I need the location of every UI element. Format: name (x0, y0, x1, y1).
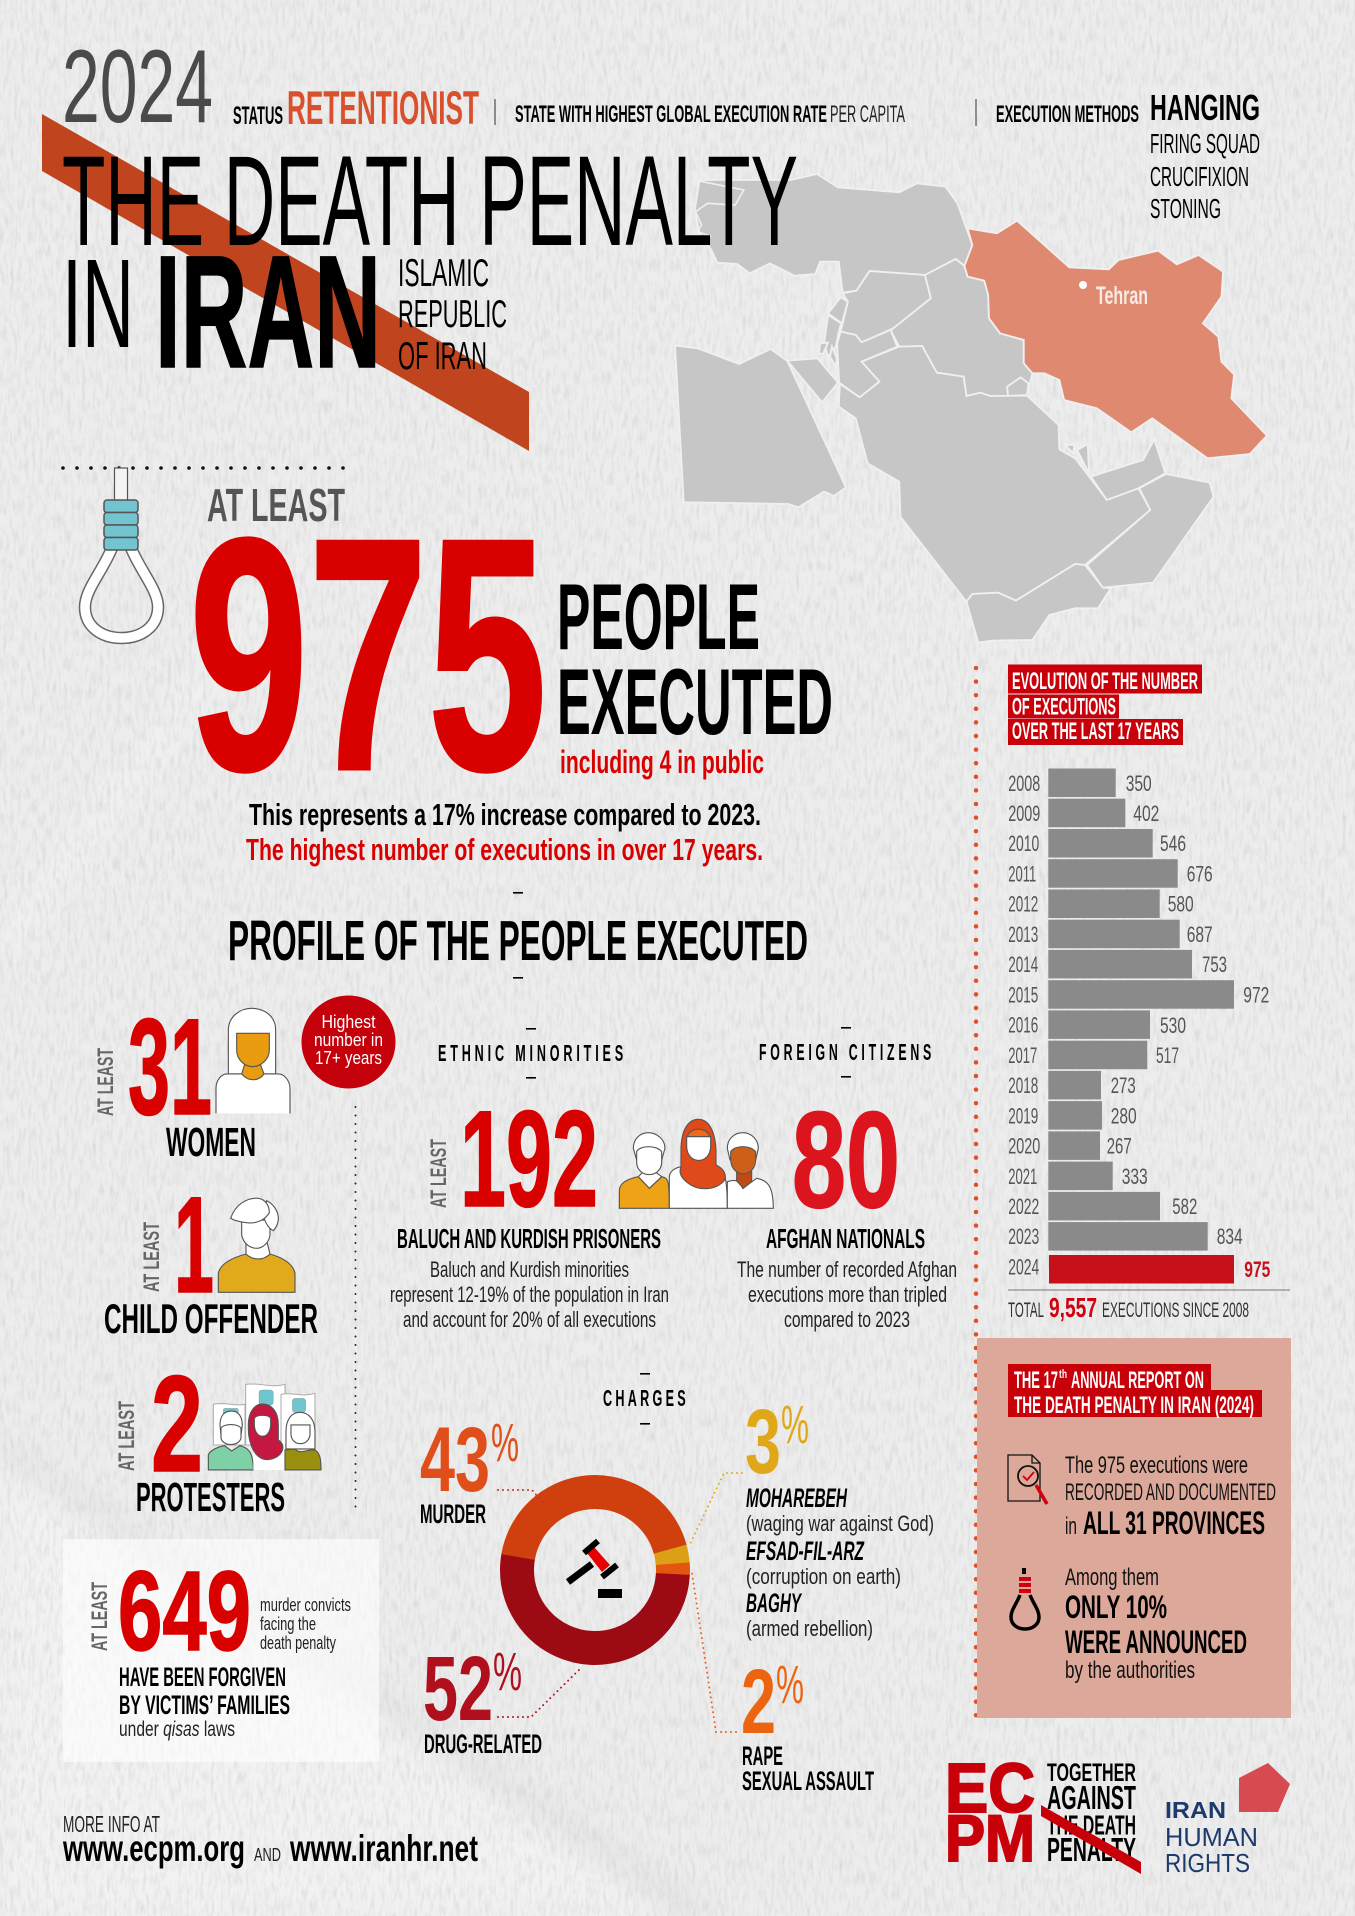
heading: profile: PROFILE OF THE PEOPLE EXECUTED (228, 909, 808, 973)
label: murder: 43 (420, 1409, 490, 1511)
bar chart heading: OVER THE LAST 17 YEARS (1012, 718, 1179, 745)
panel: forgiven: murder convicts (260, 1595, 351, 1615)
execution methods (996, 87, 1260, 224)
title: THE DEATH PENALTY (62, 130, 798, 273)
map of the Middle East (675, 174, 1267, 643)
icon: child (218, 1198, 295, 1292)
bar chart: executions per year: 267 (1107, 1134, 1132, 1158)
bar chart: executions per year: 2018 (1008, 1073, 1038, 1098)
women (93, 991, 290, 1165)
text: Baluch and Kurdish (390, 1223, 669, 1332)
women: AT LEAST (93, 1048, 118, 1116)
status: STATUS (233, 102, 283, 130)
protesters (114, 1348, 321, 1520)
label: moharebeh: % (781, 1395, 809, 1455)
label: drug-related: % (493, 1642, 522, 1702)
bar chart: executions per year: 402 (1133, 801, 1159, 826)
bar chart: executions per year: 2017 (1008, 1043, 1037, 1068)
bar chart heading: EVOLUTION OF THE NUMBER (1012, 668, 1198, 695)
bar chart: executions per year: 2013 (1008, 922, 1038, 947)
text: Afghan nationals: compared to 2023 (784, 1307, 910, 1332)
ethnic minorities number (426, 1083, 598, 1236)
label: rape: % (776, 1655, 804, 1715)
headline number: PEOPLE (557, 564, 760, 669)
execution methods: CRUCIFIXION (1150, 161, 1249, 192)
callout: highest number: Highest (322, 1012, 376, 1032)
icon: group of people (619, 1119, 773, 1208)
text: Afghan nationals (737, 1223, 957, 1332)
bar chart: executions per year: 2016 (1008, 1012, 1038, 1038)
title: OF IRAN (398, 335, 487, 378)
logo: Iran Human Rights: IRAN (1165, 1797, 1226, 1823)
text: Baluch and Kurdish: represent 12-19% of the population in Iran (390, 1282, 669, 1307)
bar chart: executions per year: 676 (1187, 862, 1213, 886)
more info: AND (254, 1845, 281, 1865)
bar chart heading: OF EXECUTIONS (1012, 694, 1116, 720)
headline number: including 4 in public (560, 744, 764, 780)
panel: annual report (977, 1338, 1291, 1718)
callout: highest number: number in (314, 1030, 383, 1050)
label: moharebeh: BAGHY (746, 1588, 803, 1618)
bar chart: executions per year: 350 (1126, 771, 1152, 796)
bar chart: executions per year: 273 (1111, 1073, 1136, 1098)
logo: Iran Human Rights: RIGHTS (1165, 1848, 1250, 1878)
bar chart: executions per year: 2011 (1008, 862, 1036, 886)
highest execution rate (515, 101, 905, 128)
text: announced: by the authorities (1065, 1657, 1195, 1684)
panel: forgiven: facing the (260, 1614, 316, 1634)
bar chart: executions per year: 333 (1122, 1164, 1148, 1189)
text: Afghan nationals: executions more than tripled (748, 1282, 947, 1307)
bar chart: executions per year: 2021 (1008, 1164, 1037, 1189)
bar chart: executions per year: 2009 (1008, 801, 1040, 826)
label: rape: RAPE (742, 1741, 783, 1771)
bar chart: executions per year: 753 (1202, 952, 1227, 977)
charges heading: CHARGES (603, 1385, 689, 1411)
status: RETENTIONIST (287, 81, 479, 134)
bar chart: executions per year: 687 (1187, 922, 1213, 947)
text: Afghan nationals: AFGHAN NATIONALS (766, 1223, 925, 1254)
logo: ECPM (945, 1749, 1141, 1875)
status (233, 81, 479, 134)
execution methods: FIRING SQUAD (1150, 128, 1260, 159)
highest execution rate: STATE WITH HIGHEST GLOBAL EXECUTION RATE (515, 101, 827, 128)
bar chart: executions per year: 2023 (1008, 1224, 1039, 1249)
more info: www.ecpm.org (62, 1828, 245, 1869)
execution methods: EXECUTION METHODS (996, 101, 1139, 128)
foreign citizens heading: FOREIGN CITIZENS (759, 1039, 935, 1065)
text: Baluch and Kurdish: BALUCH AND KURDISH PRISONERS (397, 1223, 661, 1254)
panel: forgiven: HAVE BEEN FORGIVEN (119, 1662, 286, 1692)
more info: MORE INFO AT (63, 1811, 160, 1837)
panel: forgiven: under qisas laws (119, 1718, 235, 1741)
panel: forgiven: AT LEAST (87, 1582, 112, 1651)
label: moharebeh: (armed rebellion) (746, 1616, 873, 1641)
bar chart: executions per year: 975 (1244, 1257, 1270, 1282)
label: murder: % (491, 1413, 519, 1473)
women: WOMEN (166, 1119, 256, 1165)
callout: highest number: 17+ years (315, 1048, 382, 1068)
child offender (104, 1169, 318, 1342)
bar chart: executions per year: 582 (1172, 1194, 1197, 1219)
panel: forgiven: BY VICTIMS’ FAMILIES (119, 1690, 290, 1720)
title (62, 130, 798, 401)
label: moharebeh: (corruption on earth) (746, 1564, 901, 1589)
label: drug-related: DRUG-RELATED (424, 1729, 542, 1759)
execution methods: HANGING (1150, 87, 1260, 128)
highest execution rate: PER CAPITA (830, 101, 905, 128)
title: REPUBLIC (398, 293, 507, 336)
bar chart: executions per year: 834 (1217, 1224, 1243, 1249)
text: announced: Among them (1065, 1564, 1159, 1591)
bar chart: executions per year: 546 (1160, 831, 1186, 856)
diagonal red stripe (42, 114, 529, 451)
Tehran marker (1079, 281, 1148, 310)
label: rape: 2 (741, 1651, 776, 1753)
report heading (1008, 1364, 1262, 1419)
bar chart: executions per year: 2010 (1008, 831, 1039, 856)
logo: Iran Human Rights (1165, 1763, 1290, 1878)
label: rape: SEXUAL ASSAULT (742, 1766, 874, 1796)
text: documented: in (1065, 1513, 1077, 1540)
panel: forgiven: death penalty (260, 1633, 336, 1653)
logo: ECPM: THE DEATH (1047, 1810, 1136, 1840)
logo: ECPM: PM (945, 1801, 1035, 1875)
bar chart: executions per year: EXECUTIONS SINCE 2008 (1102, 1299, 1249, 1322)
icon: gavel (568, 1541, 622, 1598)
child offender: CHILD OFFENDER (104, 1295, 318, 1342)
report heading: THE 17 (1014, 1367, 1058, 1394)
charges heading (603, 1373, 689, 1425)
bar chart: executions per year: 530 (1160, 1013, 1186, 1038)
logo: ECPM: TOGETHER (1047, 1759, 1136, 1787)
label: moharebeh: EFSAD-FIL-ARZ (746, 1536, 865, 1566)
logo: ECPM: PENALTY (1047, 1831, 1136, 1868)
text: documented (1065, 1452, 1276, 1541)
bar chart: executions per year: TOTAL (1008, 1299, 1044, 1322)
text: documented: The 975 executions were (1065, 1452, 1248, 1479)
label: drug-related: 52 (423, 1638, 493, 1740)
more info (62, 1811, 478, 1869)
label: murder: MURDER (420, 1499, 486, 1529)
icon: noose (1011, 1568, 1039, 1629)
foreign citizens number: 80 (792, 1084, 900, 1237)
bar chart: executions per year: 280 (1111, 1104, 1137, 1128)
protesters: 2 (151, 1348, 203, 1501)
more info: www.iranhr.net (289, 1828, 478, 1869)
execution methods: STONING (1150, 193, 1221, 224)
bar chart: executions per year: 2022 (1008, 1194, 1039, 1219)
protesters: PROTESTERS (136, 1474, 285, 1520)
bar chart: executions per year: 2020 (1008, 1134, 1040, 1158)
title: IRAN (155, 222, 381, 401)
donut chart: charges (499, 1474, 691, 1666)
label: drug-related (423, 1638, 581, 1759)
text: announced (1065, 1564, 1247, 1684)
title: ISLAMIC (398, 252, 489, 295)
text: announced: ONLY 10% (1065, 1589, 1167, 1625)
icon: woman (216, 1008, 290, 1113)
callout: highest number (302, 996, 396, 1088)
headline number: 975 (189, 470, 547, 840)
ethnic minorities number: AT LEAST (426, 1139, 451, 1208)
label: moharebeh: 3 (745, 1391, 781, 1493)
increase statement (246, 797, 763, 867)
bar chart: executions per year: 2019 (1008, 1104, 1038, 1128)
bar chart: executions per year: 517 (1156, 1043, 1179, 1068)
bar chart: executions per year: 2014 (1008, 952, 1038, 977)
panel: forgiven (63, 1539, 379, 1762)
bar chart: executions per year: 580 (1168, 892, 1194, 916)
child offender: 1 (174, 1169, 214, 1322)
icon: document with magnifier (1008, 1455, 1047, 1504)
bar chart: executions per year: 2015 (1008, 982, 1038, 1008)
bar chart: executions per year: 9,557 (1049, 1292, 1097, 1323)
report heading: th (1059, 1367, 1067, 1381)
ethnic minorities heading: ETHNIC MINORITIES (438, 1040, 627, 1066)
protesters: AT LEAST (114, 1401, 139, 1471)
title: IN (62, 233, 134, 374)
bar chart: executions per year: 2024 (1008, 1254, 1039, 1280)
text: Baluch and Kurdish: Baluch and Kurdish minorities (430, 1257, 629, 1282)
bar chart: executions per year (1008, 768, 1290, 1323)
label: moharebeh: (waging war against God) (746, 1511, 934, 1536)
report heading: ANNUAL REPORT ON (1071, 1367, 1204, 1394)
headline number: AT LEAST (207, 479, 345, 531)
text: Baluch and Kurdish: and account for 20% of all executions (403, 1307, 656, 1332)
icon: protesters (208, 1384, 321, 1470)
logo: ECPM: EC (945, 1749, 1035, 1827)
panel: forgiven: 649 (118, 1548, 251, 1674)
ethnic minorities number: 192 (460, 1083, 598, 1236)
bar chart: executions per year: 2012 (1008, 892, 1038, 916)
year: 2024 (62, 29, 213, 145)
women: 31 (128, 991, 212, 1144)
bar chart: executions per year: 972 (1243, 982, 1269, 1008)
label: moharebeh: MOHAREBEH (746, 1483, 847, 1513)
logo: ECPM: AGAINST (1047, 1779, 1136, 1816)
text: Afghan nationals: The number of recorded Afghan (737, 1257, 957, 1282)
headline number: EXECUTED (557, 649, 833, 754)
Tehran marker: Tehran (1096, 282, 1148, 310)
logo: Iran Human Rights: HUMAN (1165, 1822, 1258, 1852)
increase statement: The highest number of executions in over 17 years. (246, 832, 763, 867)
label: rape (692, 1573, 874, 1796)
icon: noose (85, 468, 158, 638)
bar chart: executions per year: 2008 (1008, 771, 1040, 796)
bar chart heading (1008, 664, 1202, 745)
label: moharebeh (690, 1391, 934, 1641)
increase statement: This represents a 17% increase compared to 2023. (249, 797, 761, 832)
child offender: AT LEAST (139, 1222, 164, 1292)
